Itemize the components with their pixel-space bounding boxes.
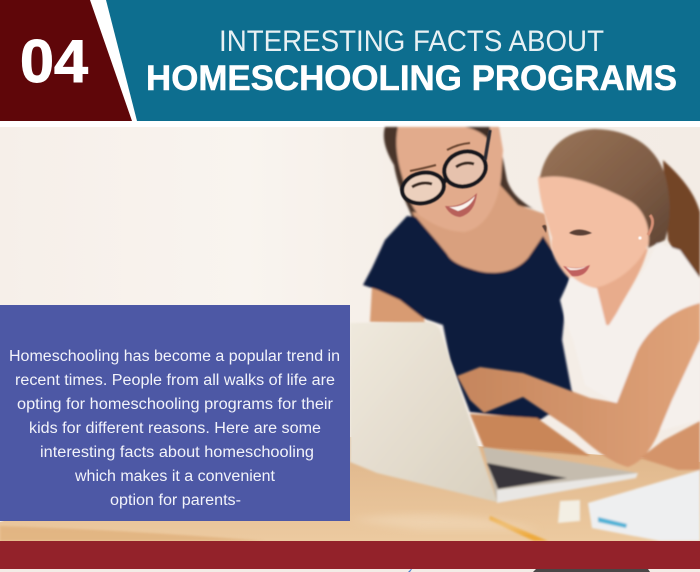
daughter's eye, mouth and earring (542, 215, 653, 276)
header: maroon number block: 04 (20, 28, 89, 95)
intro text panel: kids for different reasons. Here are some (29, 420, 321, 437)
mother's glasses and smile (399, 130, 490, 217)
table (0, 437, 700, 541)
next section peek (0, 569, 700, 572)
eraser (558, 500, 580, 523)
notebook (588, 470, 700, 541)
intro text panel: option for parents- (110, 492, 241, 509)
intro text panel: interesting facts about homeschooling (40, 444, 314, 461)
daughter (538, 129, 700, 430)
laptop base (483, 447, 638, 502)
laptop lid (350, 322, 497, 502)
mother (363, 127, 590, 456)
intro text panel: opting for homeschooling programs for their (17, 396, 333, 413)
intro text panel (0, 305, 350, 521)
intro text panel: Homeschooling has become a popular trend in (9, 348, 340, 365)
header: teal title banner: HOMESCHOOLING PROGRAMS (146, 59, 677, 98)
header: maroon number block (0, 0, 132, 121)
pencil (489, 516, 548, 541)
red divider band (0, 541, 700, 569)
header: teal title banner: INTERESTING FACTS ABOUT (219, 25, 604, 58)
photo: mother and daughter at a laptop (0, 127, 700, 541)
intro text panel: recent times. People from all walks of life are (15, 372, 335, 389)
intro text panel: which makes it a convenient (74, 468, 276, 485)
header: teal title banner (106, 0, 700, 121)
girl arm and hand (457, 303, 700, 467)
